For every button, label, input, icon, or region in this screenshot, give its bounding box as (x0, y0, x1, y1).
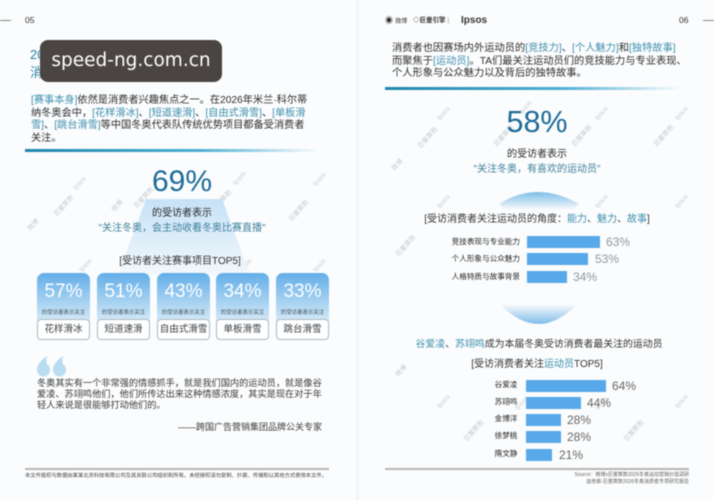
card: 短道速滑: 51% (104, 281, 143, 302)
watermark banner: speed-ng.com.cn (51, 50, 211, 71)
athlete row 3 (494, 413, 592, 427)
athlete row 5: 隋文静 (495, 449, 517, 458)
quote text (36, 378, 322, 410)
athlete row 2: 44% (587, 396, 611, 410)
watermarks: Ipsos (232, 170, 248, 187)
athlete row 5: 21% (559, 448, 583, 462)
logo: Ipsos: Ipsos (461, 15, 487, 26)
card: 花样滑冰 (36, 272, 91, 340)
athlete row 1: 谷爱凌 (495, 380, 517, 389)
left heading (30, 47, 186, 80)
left heading: 消费者的兴趣焦点在哪里？ (30, 64, 186, 80)
page number right: 06 (679, 15, 688, 25)
watermarks: 巨量算数 (463, 419, 485, 443)
page number left: 05 (25, 15, 34, 25)
card: 自由式滑雪: 自由式滑雪 (160, 324, 207, 335)
athlete row 4: 徐梦桃 (495, 431, 517, 440)
athlete row 4: 28% (567, 430, 591, 444)
left divider (25, 149, 319, 152)
watermarks: Ipsos (312, 257, 328, 274)
stat 69%: 69% (152, 165, 212, 198)
bar chart: angles (452, 235, 630, 284)
watermarks: Ipsos (436, 193, 452, 210)
angle row 1 (452, 235, 630, 249)
watermarks: 巨量算数 (493, 124, 515, 148)
athlete row 2 (494, 396, 612, 410)
card: 单板滑雪: 34% (223, 281, 262, 302)
left heading: 2026年体育赛事 (30, 47, 124, 62)
angle row 1: 竞技表现与专业能力 (452, 237, 520, 246)
watermarks: Ipsos (514, 195, 530, 212)
icon: ocean engine: ◇巨量引擎 | (413, 17, 449, 24)
watermarks: Ipsos (78, 257, 94, 274)
source note: 益普索-巨量算数2026冬奥消费者专项研究报告 (586, 478, 689, 484)
card: 短道速滑: 的受访者表示关注 (102, 310, 145, 316)
watermarks: 巨量算数 (395, 234, 417, 258)
right intro text: 个人形象与公众魅力以及背后的独特故事。 (392, 68, 587, 79)
card: 自由式滑雪: 43% (164, 281, 203, 302)
quote text: 轻人来说是很能够打动他们的。 (37, 400, 166, 410)
angle row 3 (452, 270, 598, 284)
athlete row 1 (494, 379, 636, 393)
athlete row 2: 苏翊鸣 (495, 397, 517, 406)
globe arcs (499, 191, 579, 325)
chart heading: angles: [受访消费者关注运动员的角度：能力、魅力、故事] (424, 214, 650, 225)
watermarks: Ipsos (312, 171, 328, 188)
card: 跳台滑雪: 跳台滑雪 (283, 324, 322, 335)
watermarks: 微博 (27, 218, 41, 232)
icon: quote mark (36, 356, 66, 377)
watermarks: Ipsos (674, 105, 690, 122)
angle row 2: 53% (595, 252, 619, 266)
watermarks: Ipsos (594, 105, 610, 122)
right intro text: 消费者也因赛场内外运动员的[竞技力]、[个人魅力]和[独特故事] (392, 43, 676, 54)
source note (574, 470, 690, 484)
watermarks: 微博 (111, 199, 125, 213)
card: 跳台滑雪 (275, 272, 330, 340)
card: 跳台滑雪: 33% (283, 281, 322, 302)
watermarks: Ipsos (594, 395, 610, 412)
watermarks: 巨量算数 (288, 199, 310, 223)
page gutter (356, 0, 359, 500)
watermarks: Ipsos (594, 193, 610, 210)
left intro text: 关注。 (31, 133, 62, 144)
watermarks: Ipsos (436, 393, 452, 410)
left intro text: [赛事本身]依然是消费者兴趣焦点之一。在2026年米兰·科尔蒂 (31, 95, 307, 106)
card: 跳台滑雪: 的受访者表示关注 (281, 310, 324, 316)
quote text: 爱凌、苏翊鸣他们，他们所传达出来这种情感浓度，其实是现在对于年 (37, 389, 322, 399)
left intro text: 纳冬奥会中，[花样滑冰]、[短道速滑]、[自由式滑雪]、[单板滑 (31, 108, 306, 119)
left intro text (30, 94, 308, 144)
left footnote: 本文件版权与数据由某某北京科技有限公司及其关联公司组织和所有。未经授权请勿复制、抄袭、传播和以其他方式使用本文件。 (25, 473, 327, 479)
source note: Source：微博x巨量算数2026冬奥运动营销价值调研 (575, 472, 689, 478)
stat caption: "关注冬奥，有喜欢的运动员" (473, 164, 601, 175)
watermarks: 微博 (391, 158, 405, 172)
stat caption (473, 148, 601, 175)
top5 heading: [受访者关注赛事项目TOP5] (119, 256, 241, 267)
angle row 3: 34% (573, 270, 597, 284)
watermarks: 巨量算数 (623, 419, 645, 443)
left footer rule (25, 468, 329, 470)
stat caption (98, 206, 266, 234)
card: 自由式滑雪: 的受访者表示关注 (162, 310, 205, 316)
right divider (385, 87, 681, 90)
watermarks: 巨量算数 (571, 124, 593, 148)
stat caption: 的受访者表示 (507, 149, 567, 160)
card: 自由式滑雪 (156, 272, 211, 340)
athlete row 3: 28% (567, 413, 591, 427)
card: 花样滑冰: 的受访者表示关注 (42, 310, 85, 316)
watermarks: 巨量算数 (653, 124, 675, 148)
watermarks: 巨量算数 (417, 126, 439, 150)
angle row 2 (452, 252, 620, 266)
card: 短道速滑 (96, 272, 151, 340)
stat caption: 的受访者表示 (152, 208, 212, 219)
stat caption: "关注冬奥，会主动收看冬奥比赛直播" (98, 223, 266, 234)
card: 花样滑冰: 57% (44, 281, 83, 302)
brand logos (384, 15, 488, 26)
icon: weibo: ◉ 微博 (385, 16, 407, 25)
watermarks: Ipsos (238, 257, 254, 274)
watermarks: Ipsos (436, 105, 452, 122)
headline: athletes: 谷爱凌、苏翊鸣成为本届冬奥受访消费者最关注的运动员 (416, 339, 662, 350)
card: 短道速滑: 短道速滑 (104, 324, 142, 335)
bar chart: athletes (494, 379, 636, 462)
watermarks: Ipsos (674, 193, 690, 210)
watermarks: 巨量算数 (53, 194, 75, 218)
watermark banner (40, 40, 222, 82)
quote attribution: ——跨国广告营销集团品牌公关专家 (178, 422, 322, 432)
card: 单板滑雪: 的受访者表示关注 (221, 310, 264, 316)
watermarks: Ipsos (514, 395, 530, 412)
watermarks: 巨量算数 (133, 186, 155, 210)
athlete row 4 (494, 430, 592, 444)
watermarks: 微博 (395, 364, 409, 378)
angle row 1: 63% (606, 235, 630, 249)
card: 单板滑雪: 单板滑雪 (223, 324, 262, 335)
athlete row 1: 64% (612, 379, 636, 393)
angle row 2: 个人形象与公众魅力 (452, 254, 520, 263)
right intro text: 而聚焦于[运动员]。TA们最关注运动员们的竞技能力与专业表现、 (392, 56, 687, 67)
stat 58%: 58% (506, 105, 568, 139)
watermarks: Ipsos (518, 99, 534, 116)
quote text: 冬奥其实有一个非常强的情感抓手，就是我们国内的运动员，就是像谷 (37, 378, 322, 388)
card: 花样滑冰: 花样滑冰 (44, 324, 82, 335)
angle row 3: 人格特质与故事背景 (452, 272, 520, 281)
card: 单板滑雪 (215, 272, 270, 340)
athlete row 5 (494, 448, 584, 462)
watermarks: Ipsos (72, 175, 88, 192)
left intro text: 雪]、[跳台滑雪]等中国冬奥代表队传统优势项目都备受消费者 (31, 120, 304, 131)
watermarks: Ipsos (674, 393, 690, 410)
athlete row 3: 金博洋 (495, 414, 517, 423)
right footer rule (385, 468, 689, 470)
right intro text (392, 42, 687, 79)
watermarks: 巨量算数 (211, 189, 233, 213)
pale podium backdrop (120, 198, 248, 274)
chart heading: top5 athletes: [受访消费者关注运动员TOP5] (471, 359, 603, 370)
